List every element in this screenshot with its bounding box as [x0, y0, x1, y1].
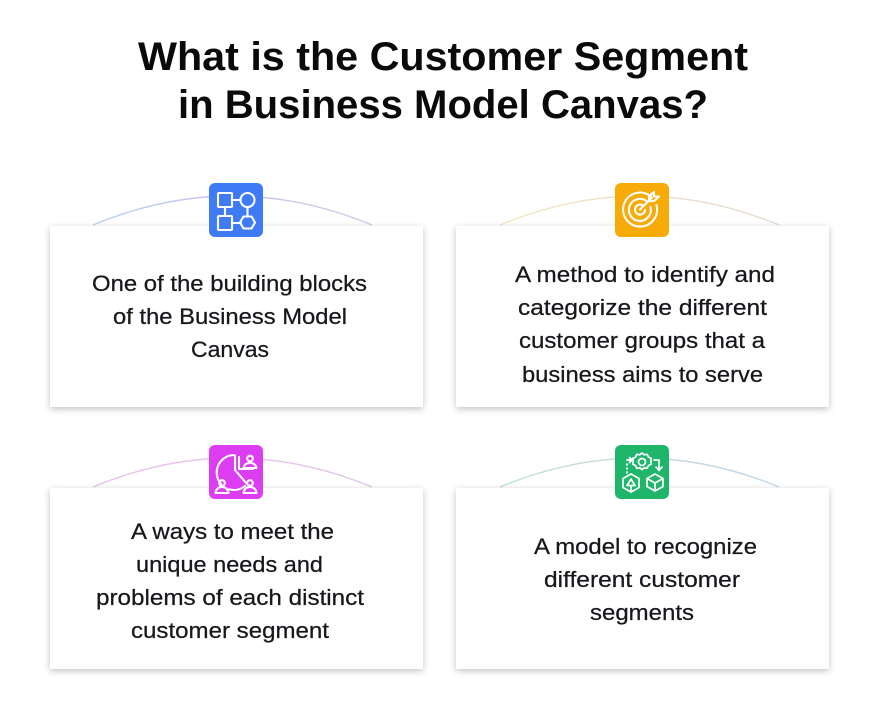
card text: customer segment [131, 618, 329, 643]
card background [456, 488, 829, 669]
card text [534, 534, 757, 625]
card text: of the Business Model [113, 304, 347, 329]
panel: building blocks [50, 183, 423, 407]
title: in Business Model Canvas? [178, 83, 708, 127]
card text: One of the building blocks [92, 271, 367, 296]
card text: Canvas [191, 337, 269, 362]
icon: pie chart with people [209, 445, 263, 499]
title: What is the Customer Segment [138, 35, 748, 79]
card text: categorize the different [518, 295, 767, 320]
card text: customer groups that a [519, 328, 766, 353]
panel: method [456, 183, 829, 407]
card text [96, 519, 364, 643]
decorative arc [500, 458, 779, 487]
decorative arc [93, 196, 372, 225]
card text: unique needs and [136, 552, 323, 577]
card text: A method to identify and [515, 262, 775, 287]
card text: A model to recognize [534, 534, 757, 559]
icon: target [615, 183, 669, 237]
card text: problems of each distinct [96, 585, 364, 610]
card text: different customer [544, 567, 740, 592]
card text: business aims to serve [522, 362, 763, 387]
icon: gears and cube [615, 445, 669, 499]
card background [50, 488, 423, 669]
card text [92, 271, 367, 362]
card text: segments [590, 600, 694, 625]
panel: recognize segments [456, 445, 829, 669]
icon: flow diagram [209, 183, 263, 237]
card text [515, 262, 775, 387]
decorative arc [93, 458, 372, 487]
panel: unique needs [50, 445, 423, 669]
title [138, 35, 748, 127]
card background [456, 226, 829, 407]
card text: A ways to meet the [131, 519, 334, 544]
card background [50, 226, 423, 407]
decorative arc [500, 196, 779, 225]
